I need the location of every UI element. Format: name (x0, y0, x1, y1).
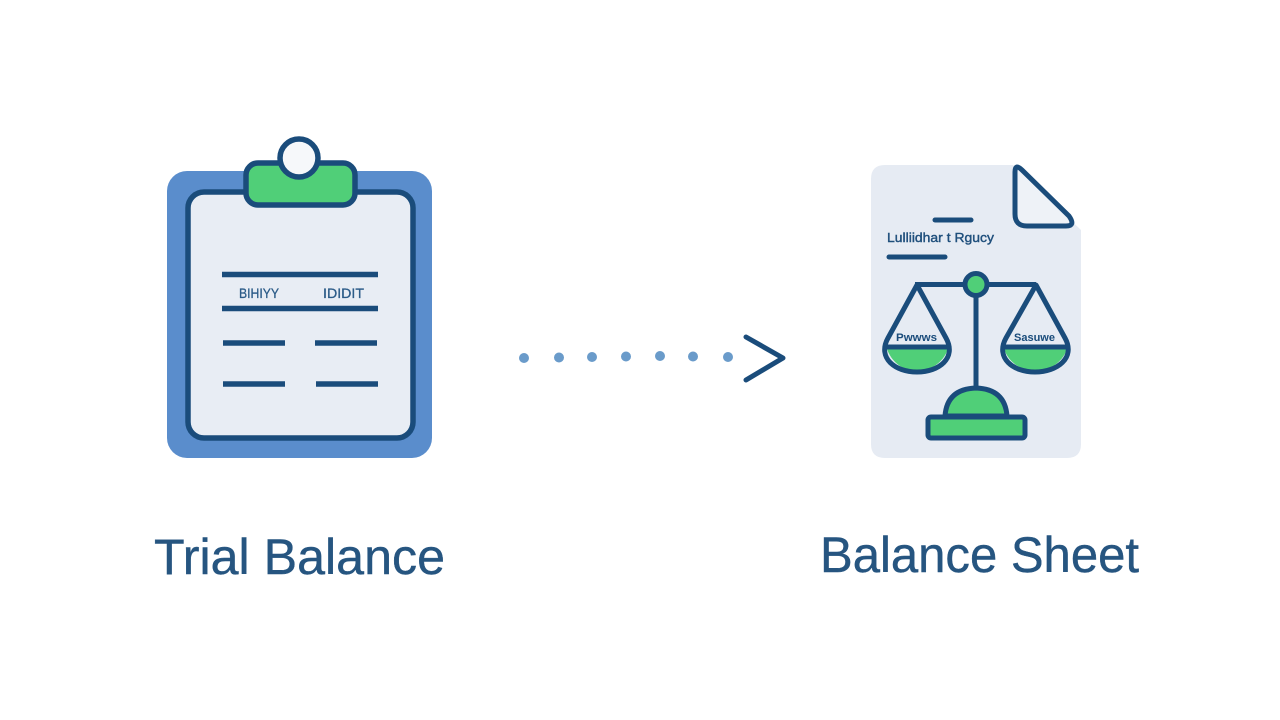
ledger column headings: BIHIYY (239, 285, 280, 301)
icon: balance sheet document (871, 165, 1081, 458)
ledger table rows (222, 274, 378, 384)
clip ring (280, 139, 318, 177)
label: balance sheet: Balance Sheet (820, 527, 1139, 583)
scale left pan: Pwwws (896, 332, 937, 344)
scale pivot (965, 274, 987, 296)
document heading: Lulliidhar t Rgucy (887, 230, 995, 245)
ledger column headings: IDIDIT (323, 285, 364, 301)
ledger column headings (239, 285, 364, 301)
scales of justice (885, 274, 1068, 438)
scale right pan (1003, 285, 1068, 372)
label: trial balance: Trial Balance (154, 529, 445, 585)
scale base (928, 417, 1025, 438)
clipboard paper (188, 192, 413, 438)
scale beam and post (915, 284, 1036, 392)
document heading lines (889, 220, 971, 257)
clip (246, 163, 355, 205)
folded corner (1015, 167, 1072, 226)
scale dome (945, 388, 1007, 416)
scale left pan (885, 285, 949, 372)
arrow dots (519, 351, 733, 363)
document page (871, 165, 1081, 458)
clipboard backing board (167, 171, 432, 458)
icon: clipboard (167, 139, 432, 458)
arrow head (746, 337, 783, 380)
arrow: dotted flow (519, 337, 783, 380)
scale right pan: Sasuwe (1014, 332, 1055, 344)
